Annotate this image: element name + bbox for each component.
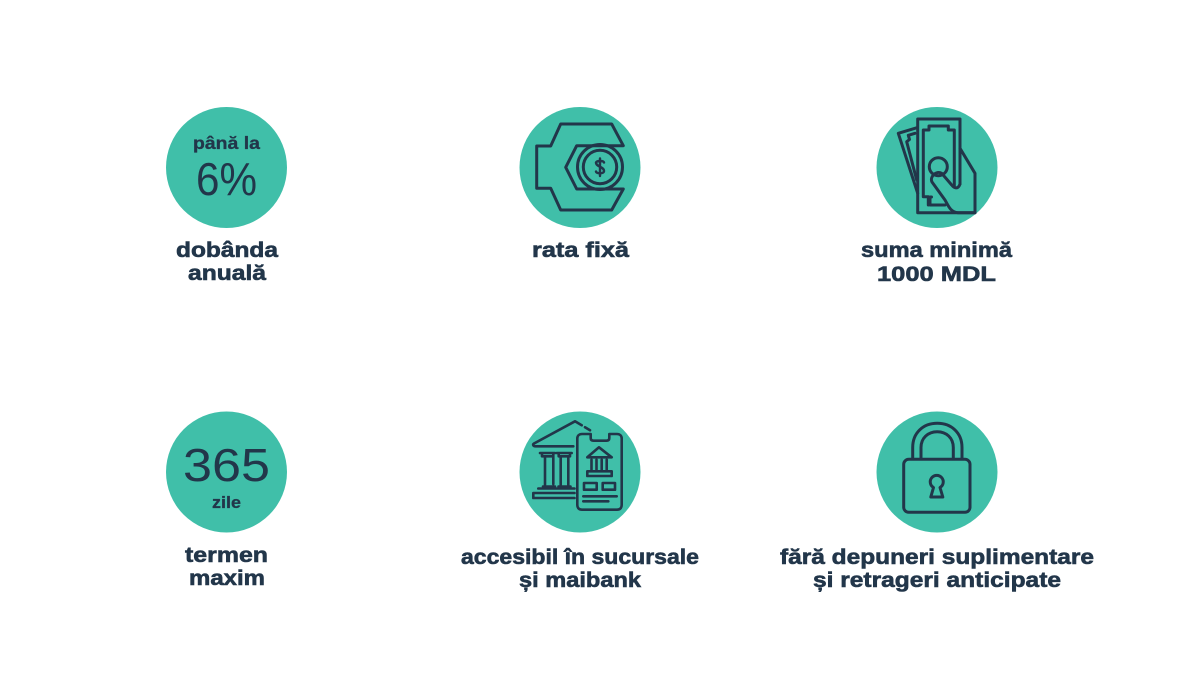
number: 6%: 6%	[196, 153, 257, 205]
label: access	[461, 545, 699, 592]
panel: annual interest	[166, 107, 287, 285]
teal circle: interest	[166, 107, 287, 228]
teal circle: minimum amount	[876, 107, 998, 228]
icon: wrench gripping coin	[537, 124, 623, 210]
label: maximum term: maxim	[189, 566, 265, 590]
text: days: zile	[212, 494, 241, 512]
label: conditions: și retrageri anticipate	[813, 568, 1061, 592]
label: access: și maibank	[519, 568, 641, 592]
panel: no top-ups or early withdrawals	[780, 412, 1094, 592]
panel: fixed rate	[520, 107, 640, 262]
label: minimum amount	[861, 238, 1013, 286]
label: annual interest: anuală	[188, 261, 267, 285]
label: conditions	[780, 545, 1094, 592]
label: annual interest	[176, 238, 279, 285]
label: conditions: fără depuneri suplimentare	[780, 545, 1094, 569]
teal circle: lock	[876, 412, 998, 532]
number: 365: 365	[183, 439, 270, 491]
label: maximum term	[185, 543, 268, 590]
panel: minimum amount	[861, 107, 1013, 286]
panel: maximum term	[166, 412, 287, 590]
icon: hand holding banknotes	[898, 119, 975, 213]
label: access: accesibil în sucursale	[461, 545, 699, 569]
label: minimum amount: suma minimă	[861, 238, 1013, 262]
icon: bank and phone	[533, 421, 622, 510]
label: minimum amount: 1000 MDL	[877, 262, 996, 286]
panel: branches and maibank	[461, 412, 699, 592]
teal circle: access	[520, 412, 640, 532]
teal circle: fixed rate	[520, 107, 640, 228]
icon: padlock	[904, 423, 970, 512]
text: up to: până la	[193, 133, 260, 153]
label: maximum term: termen	[185, 543, 268, 567]
label: annual interest: dobânda	[176, 238, 279, 262]
teal circle: term	[166, 412, 287, 532]
label: fixed rate: rata fixă	[532, 238, 630, 262]
